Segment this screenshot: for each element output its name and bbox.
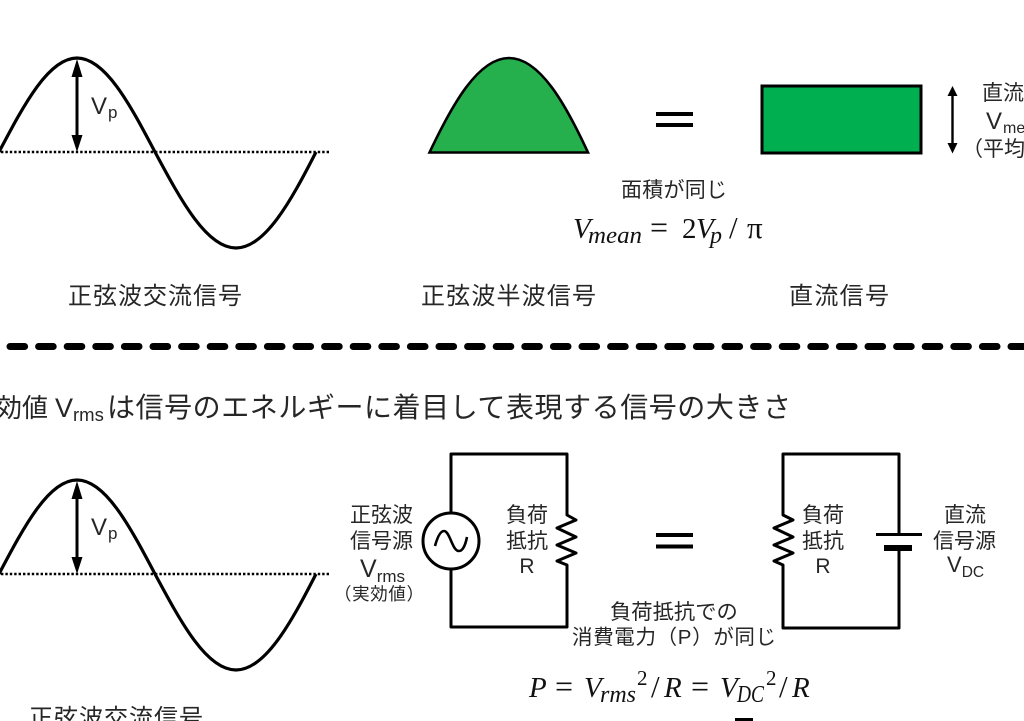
note: same power	[572, 600, 776, 649]
panel: sine wave AC signal (top)	[0, 58, 330, 310]
arrow: peak voltage	[72, 481, 82, 574]
caption: sine AC signal: 正弦波交流信号	[68, 283, 242, 310]
arrow: mean voltage	[948, 86, 958, 154]
circuit wires	[451, 454, 576, 627]
dotted baseline	[1, 573, 330, 575]
formula: Vmean: /	[729, 210, 738, 245]
label: DC value: 直流	[982, 82, 1024, 105]
equals sign (top)	[656, 112, 693, 127]
label: DC source	[933, 504, 996, 581]
label: DC source: 信号源	[933, 530, 996, 553]
DC rectangle	[762, 86, 921, 153]
label: DC source: 直流	[944, 504, 986, 527]
formula: power: =	[691, 668, 709, 704]
icon: AC source	[423, 513, 479, 569]
formula: power: V	[720, 672, 741, 704]
label: sine source: rms	[377, 567, 405, 586]
label: sine source: （実効値）	[334, 584, 424, 604]
arrow: peak voltage	[72, 59, 82, 152]
label: load resistor: R	[519, 555, 535, 578]
formula: power: P	[528, 672, 547, 704]
divider: dashed line	[10, 343, 1024, 350]
formula: Vmean: V	[696, 213, 717, 245]
formula: power: R	[791, 672, 810, 704]
caption: DC signal: 直流信号	[789, 283, 889, 310]
formula: Vmean: mean	[588, 223, 642, 249]
icon: battery	[876, 534, 922, 548]
label: sine source: V	[360, 555, 377, 583]
label: load resistor	[506, 504, 548, 578]
label: Vp: p	[108, 103, 117, 122]
formula: Vmean	[573, 209, 763, 249]
note: same power: 消費電力（P）が同じ	[572, 626, 776, 649]
label: DC source: V	[947, 552, 962, 577]
heading: RMS description: は信号のエネルギーに着目して表現する信号の大きさ	[107, 392, 791, 423]
formula: Vmean: V	[573, 213, 594, 245]
formula: power: V	[584, 672, 605, 704]
formula: Vmean: π	[747, 210, 763, 245]
formula: power: R	[663, 672, 682, 704]
label: Vp: V	[91, 514, 107, 541]
formula: Vmean: =	[650, 209, 668, 245]
label: load resistor: 抵抗	[506, 530, 548, 553]
dotted baseline	[1, 151, 330, 153]
panel: sine wave AC signal (bottom)	[0, 480, 330, 721]
clipped formula fraction bar	[735, 718, 753, 721]
formula: power: rms	[600, 682, 636, 708]
circuit wires	[774, 454, 899, 628]
heading: RMS description: V	[55, 393, 73, 423]
sine wave curve	[0, 480, 316, 670]
formula: Vmean: p	[708, 223, 722, 249]
label: Vp: V	[91, 93, 107, 120]
heading: RMS description: rms	[73, 404, 104, 425]
formula: power	[528, 666, 810, 708]
label: Vp: p	[108, 524, 117, 543]
label: sine source: 正弦波	[350, 504, 413, 527]
half-wave shape	[430, 58, 588, 152]
formula: power: DC	[736, 682, 765, 708]
formula: power: 2	[766, 666, 776, 690]
label: load resistor: 負荷	[506, 504, 548, 527]
formula: Vmean: 2	[682, 213, 696, 245]
label: sine source	[334, 504, 424, 604]
equals sign (bottom)	[656, 533, 693, 548]
sine wave curve	[0, 58, 316, 248]
note: same power: 負荷抵抗での	[610, 600, 738, 624]
label: sine source: 信号源	[350, 530, 413, 553]
panel: DC signal	[762, 82, 1024, 310]
label: load resistor: R	[815, 555, 831, 578]
panel: AC source circuit	[334, 454, 576, 627]
note: same area: 面積が同じ	[621, 179, 727, 202]
label: DC source: DC	[962, 564, 984, 581]
label: load resistor	[802, 504, 844, 578]
panel: half-wave signal	[421, 58, 596, 310]
label: load resistor: 負荷	[802, 504, 844, 527]
formula: power: =	[555, 668, 573, 704]
label: load resistor: 抵抗	[802, 530, 844, 553]
formula: power: 2	[637, 666, 648, 690]
formula: power: /	[779, 669, 788, 704]
caption: half-wave signal: 正弦波半波信号	[421, 283, 596, 310]
formula: power: /	[651, 669, 660, 704]
label: Vmean: V	[986, 108, 1002, 135]
panel: DC source circuit	[774, 454, 996, 628]
